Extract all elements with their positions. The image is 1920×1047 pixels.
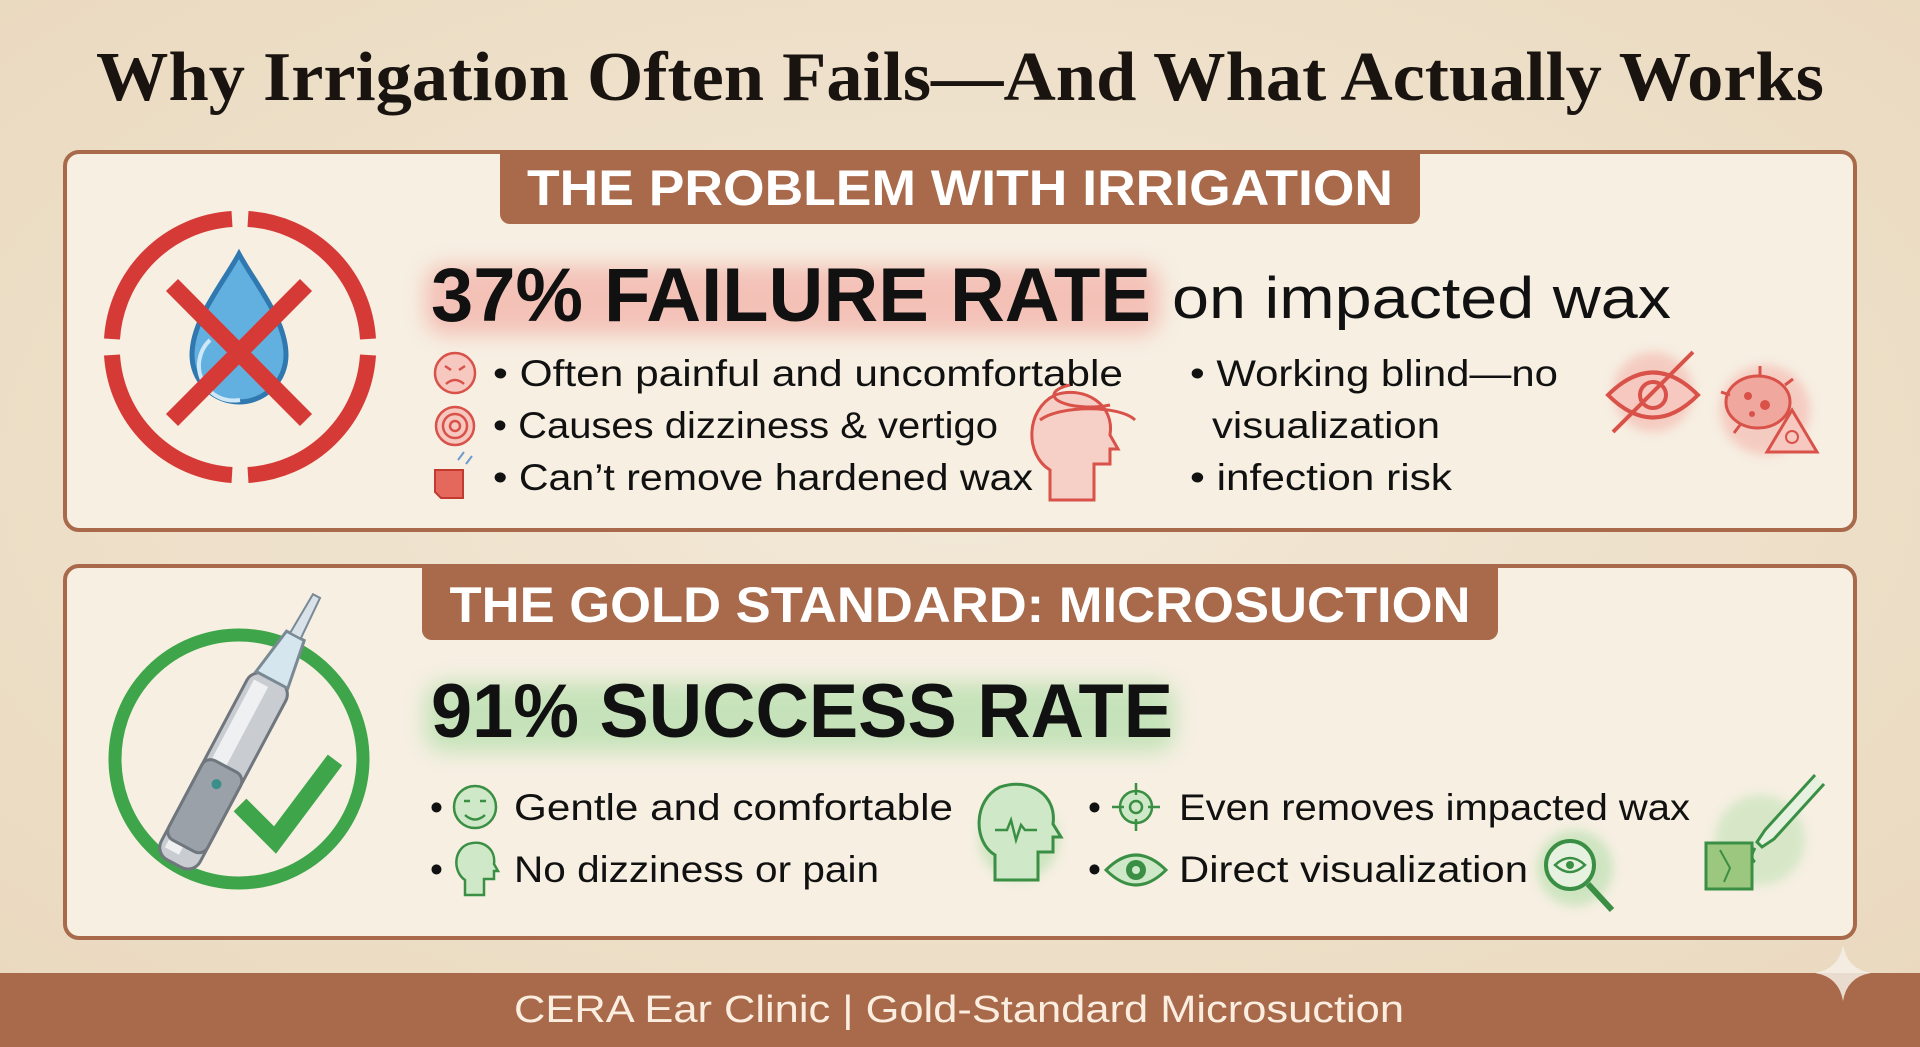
list: problems left: • Often painful and uncomfortable	[493, 353, 1123, 394]
panel: gold standard microsuction	[65, 566, 1855, 938]
list: problems right	[1190, 353, 1558, 498]
list: problems right: visualization	[1212, 405, 1440, 446]
list: problems right: • Working blind—no	[1190, 353, 1558, 394]
header tab: gold standard	[422, 566, 1498, 640]
icon: magnifier eye	[1537, 830, 1613, 910]
icon: calm head	[456, 843, 498, 895]
list: benefits left: Gentle and comfortable	[514, 787, 953, 828]
icon: germ with biohazard	[1720, 365, 1817, 455]
title: Why Irrigation Often Fails—And What Actually Works	[96, 39, 1824, 116]
list: benefits right: Even removes impacted wax	[1179, 787, 1691, 828]
list: problems left	[435, 353, 1123, 498]
stat: 37% failure rate	[425, 253, 1671, 338]
list: benefits left: No dizziness or pain	[514, 849, 879, 890]
stat: 37% failure rate: 37% FAILURE RATE	[431, 253, 1151, 338]
stat: 91% success rate: 91% SUCCESS RATE	[431, 669, 1173, 754]
header tab: problem	[500, 152, 1420, 224]
icon: dizzy head	[1032, 385, 1135, 500]
list: benefits right	[1088, 783, 1691, 890]
list: problems left: • Causes dizziness & vertigo	[493, 405, 998, 446]
icon: microsuction probe with check	[115, 586, 363, 883]
list: problems left: • Can’t remove hardened wax	[493, 457, 1034, 498]
list: benefits left: •	[430, 849, 443, 890]
list: benefits right: •	[1088, 849, 1101, 890]
footer bar: CERA Ear Clinic | Gold-Standard Microsuction	[514, 989, 1404, 1031]
stat: 37% failure rate: on impacted wax	[1172, 266, 1671, 331]
icon: smiling face	[454, 786, 496, 828]
list: problems right: • infection risk	[1190, 457, 1453, 498]
list: benefits left: •	[430, 787, 443, 828]
icon: spiral	[436, 407, 474, 445]
icon: crossed water drop	[112, 219, 368, 475]
list: benefits right: Direct visualization	[1179, 849, 1528, 890]
footer bar	[0, 973, 1920, 1047]
header tab: gold standard: THE GOLD STANDARD: MICROSUCTION	[450, 577, 1470, 633]
icon: hardened wax	[435, 452, 472, 498]
icon: sparkle	[1815, 945, 1871, 1001]
icon: eye slash	[1608, 352, 1698, 432]
list: benefits right: •	[1088, 787, 1101, 828]
icon: probe removing wax	[1706, 775, 1824, 889]
icon: eye	[1106, 855, 1166, 885]
header tab: problem: THE PROBLEM WITH IRRIGATION	[527, 160, 1393, 216]
icon: head with wave	[979, 784, 1061, 880]
icon: target	[1112, 783, 1160, 831]
list: benefits left	[430, 786, 953, 895]
icon: pained face	[435, 353, 475, 393]
panel: problem with irrigation	[65, 152, 1855, 530]
